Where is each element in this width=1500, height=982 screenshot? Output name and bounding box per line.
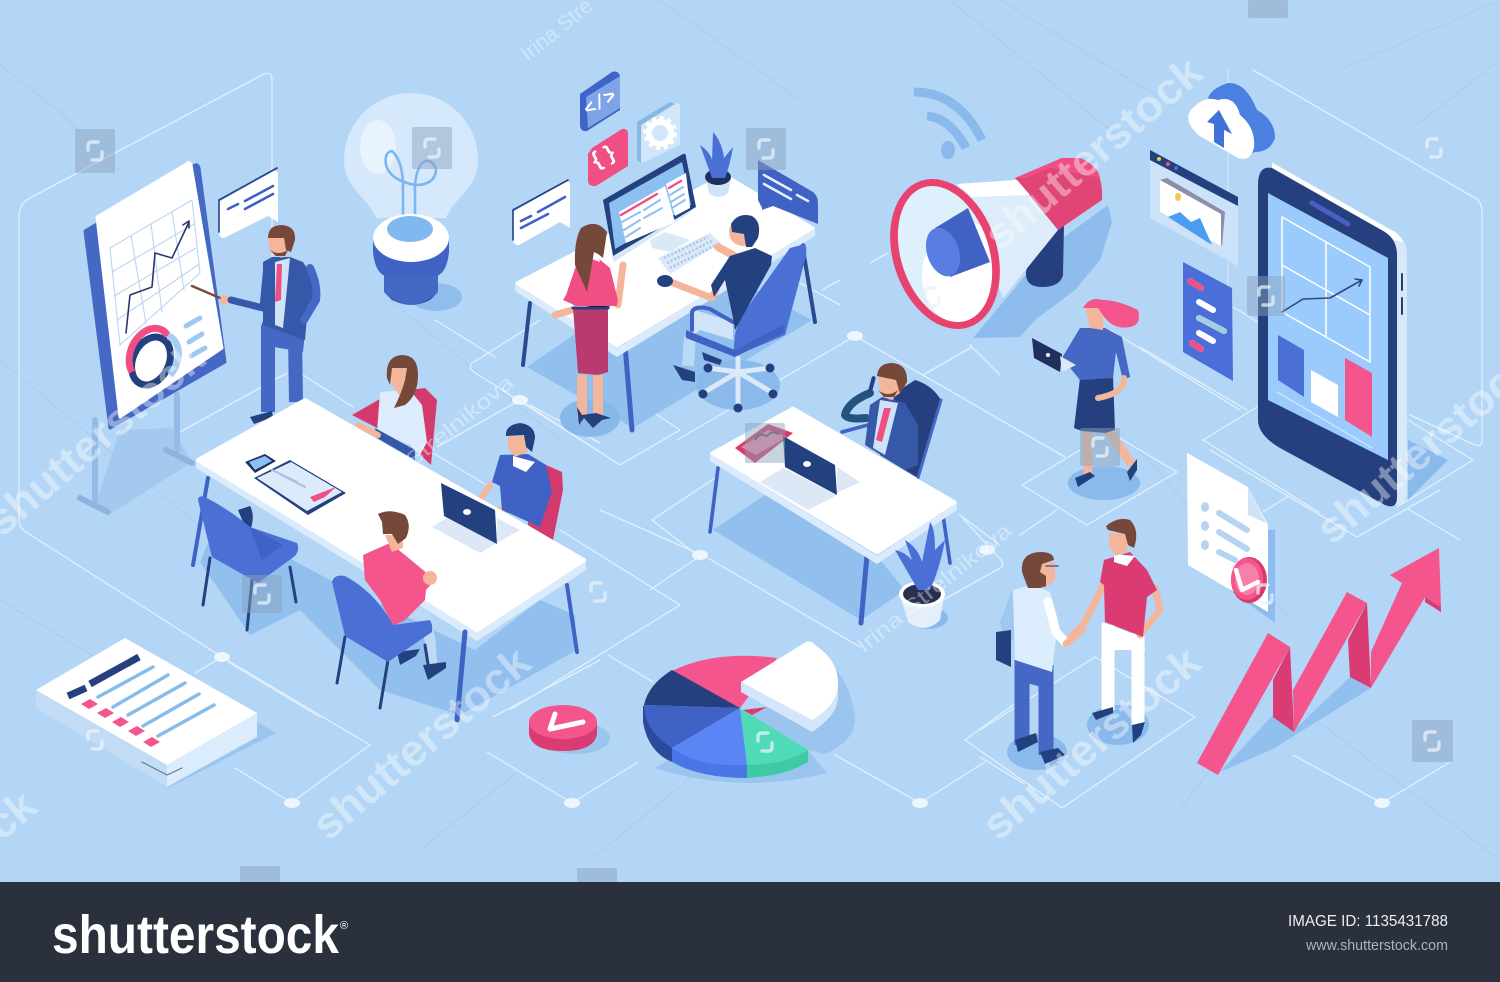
pie depth [643,705,672,762]
handshake men [996,519,1160,770]
megaphone [890,158,1112,338]
wifi icon [914,92,982,159]
check badge [529,705,610,754]
chair blue [198,496,298,630]
side list card [1183,262,1233,381]
watermarks: shutterstock [303,637,540,850]
table top [196,460,586,641]
table front legs [457,632,465,720]
document with check [1187,453,1275,623]
computer [603,154,721,274]
icon: gear [637,102,680,163]
site url: www.shutterstock.com [1305,938,1448,954]
bubble blue [758,160,818,224]
right desk with man [710,363,957,623]
notebook [245,454,346,515]
icon: code tag: </> [580,85,621,121]
icon: braces: { } [587,139,619,172]
long table with people [193,355,586,720]
light bulb [344,93,478,311]
man blue shirt [482,423,563,540]
registered mark: ® [340,920,348,932]
woman standing [555,224,623,437]
pie slices [672,656,777,708]
watermarks: shutterstock [975,47,1212,260]
man at computer on chair [657,215,806,412]
watermarks: shutterstock [973,637,1210,850]
table shadow [200,520,577,715]
man pink shirt [332,511,446,708]
red zigzag arrow [1197,548,1441,775]
web image card [1150,150,1238,266]
footer bar [0,882,1500,982]
pie shadow [655,672,855,783]
woman with tablet [1032,299,1140,500]
woman seated [352,355,437,465]
laptop [783,436,837,495]
man right [1068,519,1160,743]
top desk [515,175,815,430]
laptop shade [760,468,837,510]
table legs [193,478,577,652]
whiteboard [80,163,225,513]
pie lifted slice [741,682,838,732]
image id: IMAGE ID: 1135431788 [1288,913,1448,930]
phone device [1258,162,1448,506]
laptop on long table [432,483,520,553]
code icons [580,72,680,186]
pie chart [643,641,855,783]
document stack [36,638,276,788]
book and glasses [735,424,793,463]
footer logo: shutterstock [52,905,340,965]
presenter [192,225,317,424]
potted plant [895,522,948,629]
speech bubbles top [513,160,818,245]
speech bubble left [219,168,278,238]
watermarks: Irina Strelnikova [355,371,519,510]
man on phone [842,363,941,478]
desk plant [700,132,733,197]
man left [996,552,1082,764]
watermarks: Irina Strelnikova [853,519,1017,658]
cloud upload [1188,83,1275,159]
bubble white [513,180,570,245]
